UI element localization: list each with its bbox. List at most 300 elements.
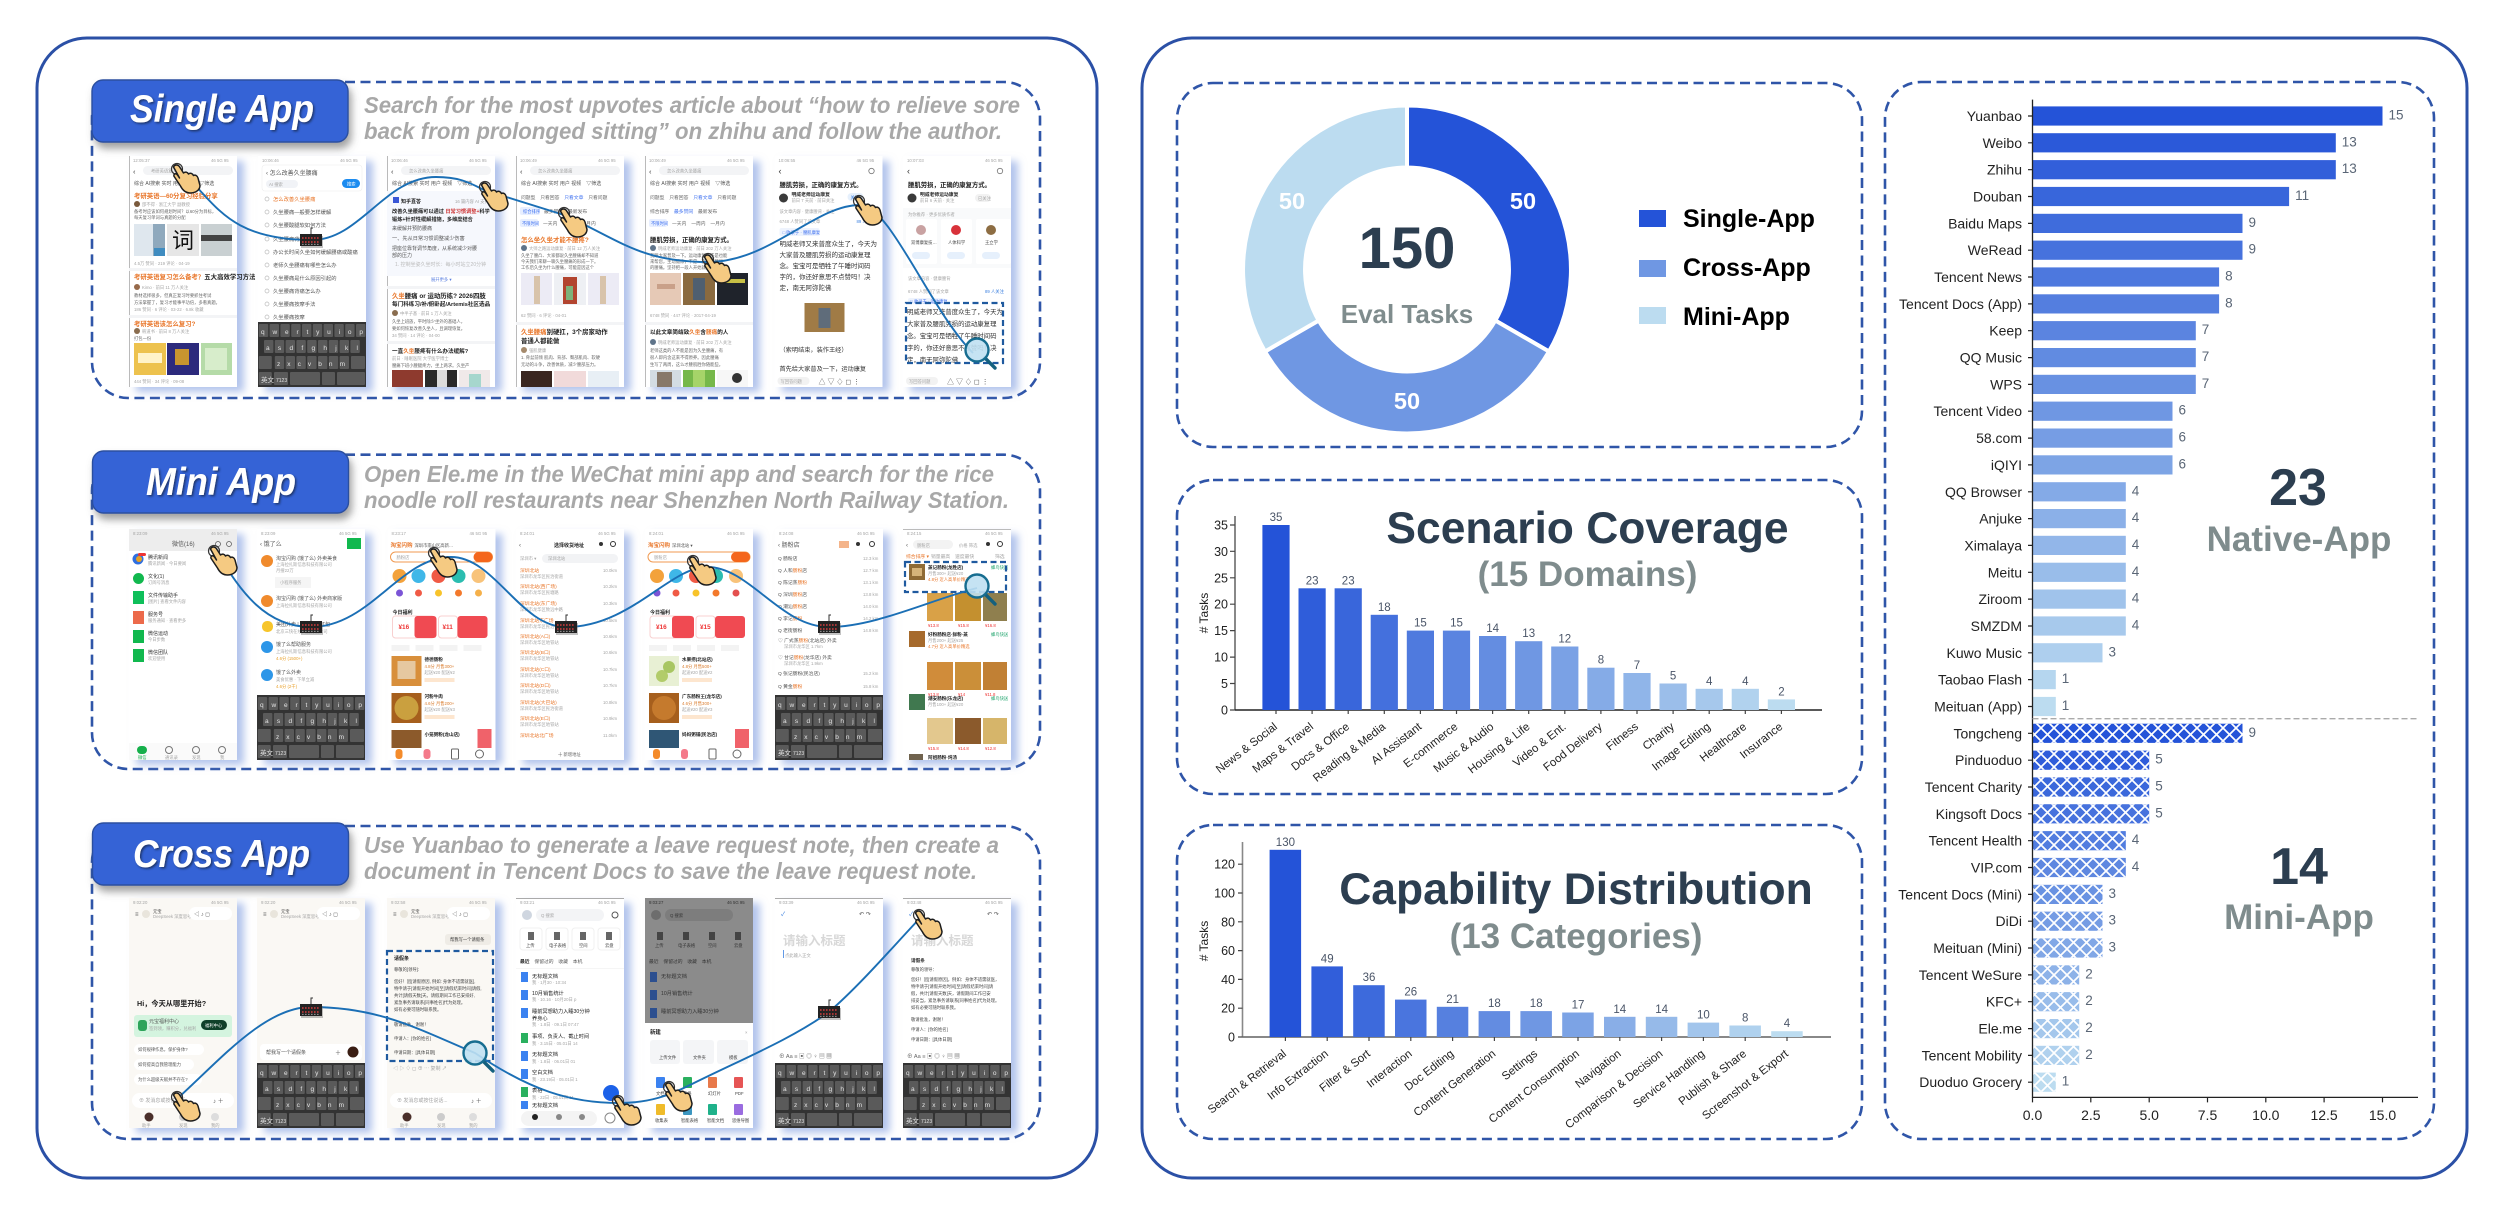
phone: new document sheet: 文档 [656, 1090, 665, 1097]
phone: rice noodle restaurant results: 46 5G 95 [985, 531, 1003, 536]
badge: Single App: Single App [130, 88, 314, 131]
action icon: tap search box [688, 556, 716, 585]
app labels: DiDi [1996, 913, 2022, 929]
phone: filter panel results: 久坐了腰凸、大家都说久坐腰痛却不知道 [521, 252, 599, 259]
action icon: follow [854, 196, 882, 225]
phone: Tencent Docs home: 空白文档 [532, 1068, 553, 1076]
bar chart: scenario coverage: AI Assistant [1370, 720, 1425, 767]
bar values: 5 [2155, 805, 2163, 820]
bar values: 4 [2132, 510, 2140, 525]
bar values: 8 [2225, 268, 2233, 284]
bar chart: capability distribution: Service Handling [1631, 1048, 1707, 1111]
bar chart: scenario coverage: Video & Ent. [1511, 721, 1569, 770]
phone: zhihu search results: 邵不得 · 浙江大学 副教授 [142, 201, 191, 208]
phone: document with pasted note: 假，共计[请假天数]天，请假期间工作已安 [911, 990, 991, 997]
phone: Tencent Docs home: 无标题文档 [532, 972, 558, 980]
action icon: type query [818, 615, 841, 635]
phone: rice noodle restaurant results: ¥15.8 [928, 746, 939, 751]
phone: zhihu search results: 方法掌握了，复习才能事半功倍，多看真题。 [134, 299, 220, 306]
phone: AI answer results: 腰痛下班小腰腿疼力，坐上两求。久坐产 [392, 362, 469, 369]
phone: article with follow button: 89 人关注 [856, 218, 876, 225]
phone: filter panel results: 最多赞同 最新发布 [544, 208, 587, 215]
bar chart: capability distribution: 130 [1276, 837, 1295, 849]
phone: rice noodle restaurant results: 4.8分 近人高单价精选 [928, 576, 970, 583]
bar values: 6 [2178, 430, 2186, 445]
phone: WeChat search for Ele.me: 4.6分 (2千) [276, 683, 298, 690]
action icon: tap search [172, 164, 200, 193]
bar chart: scenario coverage: 30 [1214, 545, 1228, 559]
highlight box: mini app [905, 562, 1006, 592]
legend: Cross-App [1683, 254, 1811, 282]
phone: new document sheet: 文件夹 [693, 1054, 707, 1061]
bar chart: capability distribution: Publish & Share [1677, 1048, 1749, 1108]
phone: Ele.me rice noodle search: 淘宝闪购 [648, 541, 671, 549]
action icon: tap sort [558, 208, 587, 237]
phone: Ele.me search list: 深圳市龙华区地铁站 [520, 688, 559, 695]
phone: document with pasted note: z x c v b n m [922, 1102, 990, 1109]
app labels: Douban [1973, 188, 2022, 204]
app labels: 58.com [1976, 430, 2022, 446]
x axis labels: 10.0 [2252, 1107, 2280, 1123]
bar values: 5 [2155, 778, 2163, 794]
phone: AI answer results: 每门科练习/补/俯卧起/Artemis社区选品 [392, 300, 491, 308]
phone: blank document editor: ↶ ↷ [859, 911, 871, 918]
heading: capability distribution: (13 Categories) [1450, 917, 1702, 956]
phone: document with pasted note: a s d f g h j k l [911, 1086, 1004, 1093]
phone: filter panel results: 强肌健康 [529, 347, 547, 354]
bar chart: scenario coverage: 15 [1450, 618, 1463, 630]
phone: Ele.me search suggestions: 13.1 km [863, 580, 879, 585]
phone: Ele.me search list: 选择收货地址 [554, 542, 584, 549]
phone: document with pasted note: 申请日期：[具体日期] [911, 1036, 952, 1043]
callout: 23 native apps: Native-App [2207, 520, 2391, 559]
phone: article with follow button: 念。宝宝可是牺牲了午睡时间码 [780, 261, 871, 270]
phone: filter panel results: 怎么改善久坐腰痛 [538, 167, 573, 174]
bar chart: scenario coverage: 35 [1214, 518, 1228, 532]
phone: Ele.me search list: 深圳市龙华区民塘路 [520, 589, 559, 596]
bar chart: capability distribution: 80 [1221, 915, 1235, 929]
phone: rice noodle restaurant results: 阿姐肠粉·炖汤 [928, 754, 957, 761]
phone: Ele.me search suggestions [775, 529, 883, 760]
phone: new document sheet: 空间 [708, 942, 717, 949]
phone: Yuanbao generated note: 特申请于[请假开始时间]至[请假结束时间]请假, [394, 985, 482, 992]
bars: native apps [2032, 106, 2382, 716]
bar chart: scenario coverage: Housing & Life [1466, 721, 1533, 776]
phone: Ele.me rice noodle search [645, 529, 753, 760]
bar chart: scenario coverage: 4 [1706, 676, 1713, 688]
phone: rice noodle restaurant results: 4.7分 近人高单价精选 [928, 643, 970, 650]
phone: article with recommended authors: 定，南无阿弥陀佛 [907, 355, 959, 364]
phone: Ele.me search list: 深圳市龙华区民治街道 [520, 573, 564, 580]
phone: Ele.me search list: 深圳市龙华区致远中路 [520, 606, 564, 613]
action icon: tap input [172, 1092, 200, 1121]
phone: WeChat search for Ele.me: 美团外卖 | 美团外卖红包 [276, 621, 330, 628]
phone: filter panel results: 62 赞同 · 6 评论 · 04-01 [521, 312, 567, 319]
bar values: 4 [2132, 537, 2140, 552]
phone: WeChat search for Ele.me: 饿了么帮助服务 [276, 641, 311, 648]
phone: search suggestions with keyboard: 搜索 [347, 180, 356, 188]
phone: blank document editor: 46 5G 95 [857, 900, 875, 905]
app labels: Tencent Health [1929, 833, 2022, 849]
phone: document with pasted note: 申请人：[你的姓名] [911, 1026, 948, 1033]
bar chart: scenario coverage: 18 [1378, 602, 1391, 614]
phone: Ele.me rice noodle search: ¥15 [700, 624, 711, 631]
phone: rice noodle restaurant results: 蜂鸟快送 [991, 631, 1009, 638]
phone: article with follow button: ‹ [778, 166, 782, 176]
phone: Ele.me search suggestions: 15.8 km [863, 684, 879, 689]
phone: new document sheet: 思维导图 [732, 1117, 749, 1124]
phone: AI answer results: 46 5G 95 [469, 158, 487, 163]
phone: zhihu search results: 186 赞同 · 6 评论 · 03-22 · 6.8k 收藏 [134, 306, 204, 313]
phone: Tencent Docs home: 我 · 1月30 · 10:34 [532, 979, 567, 986]
app labels: Anjuke [1979, 511, 2022, 527]
phone: WeChat chat list: 腾讯新闻 [148, 554, 168, 561]
bar chart: capability distribution: 14 [1655, 1004, 1669, 1016]
phone: Ele.me search list: 深圳北站(大巴站) [520, 699, 557, 706]
bar chart: scenario coverage: 20 [1214, 598, 1228, 612]
bar chart: capability distribution: Interaction [1365, 1048, 1415, 1090]
bar chart: capability distribution: Content Generation [1412, 1048, 1498, 1119]
app labels: Ele.me [1978, 1021, 2022, 1037]
phone: Ele.me rice noodle search: 妈妈粥铺(民治店) [682, 731, 718, 738]
phone: Yuanbao generated note: 申请人：[你的姓名] [394, 1035, 431, 1042]
bar values: 3 [2108, 644, 2116, 659]
phone: Ele.me search suggestions: Q 潮汕肠粉店 [778, 603, 807, 610]
phone: document with pasted note: 9:03:48 [907, 900, 922, 905]
phone: blank document editor: 点此输入正文 [785, 952, 811, 959]
heading: scenario coverage: Scenario Coverage [1386, 504, 1789, 553]
phone: Yuanbao generated note [387, 898, 495, 1129]
phone: Ele.me mini app home: ¥11 [442, 624, 453, 631]
phone: AI answer results [387, 156, 495, 387]
action icon: type prompt [300, 998, 323, 1018]
phone: filter panel results: 怎么坐久坐才能不腰疼? [521, 235, 589, 244]
phone: search suggestions with keyboard [258, 156, 366, 387]
phone: Ele.me search list: 十 新增地址 [558, 751, 581, 758]
phone: sorted results: 10:06:49 [649, 158, 666, 163]
phone: Yuanbao typing prompt: ◁ ♪ ◻ [322, 911, 338, 918]
phone: new document sheet: 上传 [655, 942, 664, 949]
phone: Ele.me search list: 深圳市龙华区地铁站 [520, 672, 559, 679]
phone: AI answer results: 一、先从日常习惯调整减少伤害 [392, 234, 465, 242]
phone: article with follow button: 明威老师运动康复 [792, 191, 830, 198]
phone: Ele.me search suggestions: 14.2 km [863, 616, 879, 621]
app labels: Tongcheng [1953, 725, 2022, 741]
phone: Ele.me rice noodle search: 4.8分 月售500+ [682, 663, 712, 670]
phone: search suggestions with keyboard: 久坐腰痛—般要怎样缓解 [273, 208, 332, 216]
x axis labels: 2.5 [2081, 1107, 2101, 1123]
phone: Ele.me mini app home: 淘宝闪购 [390, 541, 413, 549]
phone: Yuanbao home: 元宝 [153, 908, 162, 915]
phone: Yuanbao generated note: 46 5G 95 [469, 900, 487, 905]
phone: zhihu search results: 考研英语复习怎么备考？五大高效学习方法 [134, 272, 256, 281]
phone: WeChat search for Ele.me: 7123 [275, 751, 286, 757]
phone: Yuanbao typing prompt: q w e r t y u i o p [260, 1070, 362, 1077]
phone: article with follow button: （索明结束，装作王经） [780, 346, 848, 354]
bar values: 4 [2132, 591, 2140, 606]
phone: WeChat search for Ele.me: z x c v b n m [276, 734, 344, 741]
bar values: 15 [2388, 108, 2404, 122]
phone: search suggestions with keyboard: z x c v b n m [277, 361, 345, 368]
phone: sorted results: 明威老师运动康复 · 前日 202 万人关注 [658, 245, 732, 252]
phone: Ele.me search list: 10.3km [603, 601, 618, 606]
panel: single app example [92, 80, 1040, 398]
phone: search suggestions with keyboard: 久坐腰痛是什么原因引起的 [273, 274, 337, 282]
action icon: tap filter [480, 182, 508, 211]
phone: article with follow button: 首先给大家普及一下，运动康复 [780, 365, 866, 373]
phone: search suggestions with keyboard: 老师久坐腰痛有哪些怎么办 [273, 261, 337, 269]
phone: rice noodle restaurant results: 月售100+ 起送¥20 [928, 701, 964, 708]
phone: WeChat chat list: 微信 [138, 754, 147, 761]
phone: WeChat search for Ele.me: 北京三快在线科技有限公司 [276, 628, 328, 635]
phone: AI answer results: 怎么改善久坐腰痛 [409, 167, 444, 174]
bar values: 2 [2085, 966, 2093, 981]
phone: Ele.me search list: 深圳北站(B口) [520, 649, 551, 656]
bar chart: scenario coverage: 2 [1778, 686, 1785, 698]
trajectory: cross app [178, 917, 921, 1103]
phone: Yuanbao home: ⊕ 发消息或按住说话... [139, 1097, 190, 1104]
action icon: verify [966, 574, 995, 604]
phone: article with recommended authors: 前日 6 天前 · 关注 [920, 197, 955, 204]
phone: article with recommended authors: □ 收录于 · 运动康复 [910, 298, 948, 305]
phone: article with recommended authors: 大家普及腰肌劳损的运动康复理 [907, 319, 997, 328]
phone: filter panel results: 工作后久坐为什么腰痛，可能是因这个 [521, 264, 595, 271]
phone: AI answer results: 展开更多 ▾ [431, 276, 452, 283]
donut chart [1243, 106, 1571, 433]
bar chart: scenario coverage: Image Editing [1650, 721, 1713, 774]
phone: sorted results: 老师这类的人不能是因为久坐腰痛，有 [650, 347, 724, 354]
phone: Ele.me search list: 10.8km [603, 700, 618, 705]
phone: Yuanbao home: 元宝福利中心 [149, 1018, 179, 1025]
phone: filter panel results: 一天内 一周内 一月内 [543, 220, 596, 227]
highlight box: cross app [387, 951, 493, 1061]
phone: Yuanbao typing prompt: ＋ [335, 1050, 341, 1057]
phone: sorted results: 来帮您，主动锻炼，不是一直躺着腰痛 [650, 258, 724, 265]
phone: new document sheet: PDF [735, 1091, 744, 1096]
bar chart: capability distribution: 10 [1697, 1010, 1710, 1022]
phone: Yuanbao generated note: 尊敬的[领导]: [394, 966, 419, 973]
phone: zhihu search results: 4.5万 赞同 · 219 评论 · 04-19 [134, 260, 190, 267]
phone: Ele.me mini app home: 46 5G 95 [470, 531, 488, 536]
phone: Ele.me rice noodle search: 肠粉店 [654, 554, 668, 561]
phone: rice noodle restaurant results: 8:24:15 [907, 531, 922, 536]
phone: document with pasted note: 46 5G 95 [985, 900, 1003, 905]
phone: Tencent Docs home: 云盘 [605, 942, 614, 949]
app labels: Taobao Flash [1938, 672, 2022, 688]
phone: Ele.me search suggestions: 13.8 km [863, 592, 879, 597]
bar chart: scenario coverage: E-commerce [1402, 721, 1460, 770]
bar chart: scenario coverage: 23 [1342, 575, 1355, 587]
phone: rice noodle restaurant results: 肠粉店 [917, 542, 931, 549]
phone: WeChat search for Ele.me: 上海拉扎斯信息科技有限公司 [276, 648, 332, 655]
phone: Ele.me search list: 10.6km [603, 650, 618, 655]
phone: Ele.me search list: 深圳市龙华区地铁站 [520, 639, 559, 646]
phone: Ele.me mini app home: 4.6分 月售200+ [424, 700, 455, 707]
phone: rice noodle restaurant results: 筛选 [995, 553, 1005, 560]
phone: Ele.me search list: 深圳北站东广场 [520, 617, 554, 624]
phone: WeChat chat list: 服务通知 · 查看更多 [148, 617, 187, 624]
donut center text: 150 [1359, 216, 1455, 281]
phone: document with pasted note: 您好！因[请假原因]，例如：身体不适需就医， [911, 976, 999, 983]
heading: capability distribution: Capability Distribution [1339, 865, 1813, 914]
phone: Ele.me search list: 深圳北站(西广场) [520, 583, 557, 590]
phone: Ele.me search list: 10.7km [603, 667, 618, 672]
phone: blank document editor: q w e r t y u i o p [778, 1070, 880, 1077]
app labels: iQIYI [1991, 457, 2022, 473]
bar chart: capability distribution: 20 [1221, 1002, 1235, 1016]
phone: Tencent Docs home: 电子表格 [549, 942, 567, 949]
phone: document with pasted note: 敬请批准，谢谢！ [911, 1016, 945, 1023]
panel: task examples (left) [37, 38, 1097, 1178]
phone: zhihu search results: 46 5G 95 [211, 158, 229, 163]
phone: AI answer results: 一直久坐腰疼有什么办法缓解? [392, 347, 469, 355]
x axis labels: 0.0 [2023, 1107, 2042, 1123]
phone: Ele.me search suggestions: Q 肠粉店 [778, 555, 798, 562]
phone: WeChat chat list: 欢迎使用 [148, 655, 165, 662]
bar chart: capability distribution: 120 [1214, 858, 1235, 872]
bar chart: scenario coverage: Music & Audio [1432, 721, 1496, 775]
app labels: Meituan (App) [1934, 698, 2022, 714]
phone: search suggestions with keyboard: AI 搜索 [269, 181, 284, 188]
phone: AI answer results: 锻炼+针对性缓解措施，多维度结合 [392, 215, 474, 223]
phone: Yuanbao generated note: 紧急事务请联系[同事姓名]代为处理。 [394, 999, 465, 1006]
phone: Ele.me search suggestions: 14.8 km [863, 628, 879, 633]
bar values: 4 [2132, 564, 2140, 579]
task description: single app: Search for the most upvotes article about “how to relieve sore [364, 92, 1020, 118]
phone: article with recommended authors: 人体科学 [948, 239, 966, 246]
phone: new document sheet: 表格 [683, 1090, 692, 1097]
heading: scenario coverage [1386, 504, 1789, 594]
bar values: 4 [2132, 859, 2140, 874]
phone: zhihu search results: 韩道书 · 前日 8 万人关注 [142, 328, 190, 335]
phone: Yuanbao home: 签到领，赚积分，兑福利 [149, 1025, 196, 1032]
phone: Yuanbao home: 我的 [211, 1122, 220, 1129]
phone: rice noodle restaurant results: 好粉肠粉店·鲜粉·蒸 [928, 631, 968, 638]
bar chart: scenario coverage: 8 [1598, 655, 1604, 667]
phone: article with recommended authors: 腰肌劳损，正确的康复方式。 [908, 180, 991, 189]
phone: search suggestions with keyboard: 怎么改善久坐腰痛 [273, 195, 316, 203]
phone: article with follow button: 大家普及腰肌劳损的运动康复理 [780, 250, 871, 259]
legend [1639, 205, 1815, 331]
phone: search suggestions with keyboard: 英文 [261, 375, 274, 384]
action icon: open article [702, 254, 731, 283]
app labels: Kuwo Music [1947, 645, 2022, 661]
app labels: WeRead [1968, 242, 2022, 258]
phone: article with recommended authors: 10:07:03 [907, 158, 924, 163]
legend: Single-App [1683, 205, 1815, 233]
phone: article with follow button: 关注 [850, 194, 860, 201]
phone: zhihu search results: 考研英语复习 [151, 167, 177, 174]
phone: article with recommended authors: 46 5G 95 [985, 158, 1003, 163]
phone: rice noodle restaurant results: 蜂鸟快送 [991, 695, 1009, 702]
bar chart: capability distribution: Comparison & Decision [1563, 1048, 1665, 1131]
phone: search suggestions with keyboard: 久坐腰痛按摩手法 [273, 300, 315, 308]
bar chart: scenario coverage [1197, 512, 1822, 785]
phone: AI answer results: 知乎直答 [401, 198, 421, 205]
x axis labels: 5.0 [2139, 1107, 2159, 1123]
phone: zhihu search results: 444 赞同 · 34 评论 · 09-08 [134, 378, 185, 385]
x axis labels: 7.5 [2198, 1107, 2217, 1123]
phone: AI answer results: 要如何恢复改善久坐人，且调理恢复。 [392, 325, 465, 332]
bar values: 13 [2342, 134, 2357, 149]
donut labels: 50 [1510, 188, 1536, 214]
phone: Ele.me search suggestions: ♡ 甘记肠粉(龙华店) 外卖 [778, 654, 832, 661]
phone: article with recommended authors [903, 156, 1011, 387]
phone: WeChat search for Ele.me: 4.6分 (1500+) [276, 655, 303, 662]
bar chart: capability distribution: 100 [1214, 886, 1235, 900]
app labels: Tencent WeSure [1919, 967, 2022, 983]
app labels: Keep [1989, 323, 2022, 339]
phone: Ele.me search suggestions: Q 李记肠粉 [778, 615, 802, 622]
phone: new document sheet: 幻灯片 [708, 1090, 721, 1097]
bar values: 9 [2248, 242, 2256, 257]
phone: Ele.me mini app home: 肠粉店 [396, 554, 410, 561]
phone: Yuanbao home: 发现 [179, 1122, 188, 1129]
phone: filter panel results: 无动的斗争，改善体质，减少腰部压力。 [521, 361, 598, 368]
phone: WeChat search for Ele.me: a s d f g h j k l [265, 718, 358, 725]
bar chart: capability distribution: 26 [1404, 987, 1417, 999]
bar values: 13 [2342, 161, 2357, 176]
action icon: paste note [818, 1000, 841, 1020]
bar values: 2 [2085, 993, 2093, 1008]
phone: Tencent Docs home: 我 · 22日 · 05.01日 11 [532, 1094, 574, 1101]
phone: Tencent Docs home: 最近 保留过的 收藏 本机 [520, 958, 583, 965]
phone: WeChat chat list: 文化(1) [148, 573, 164, 580]
phone: new document sheet: 46 5G 95 [727, 900, 745, 905]
phone: document with pasted note: 特申请于[请假开始时间]至[请假结束时间]请 [911, 983, 994, 990]
phone: Yuanbao generated note: 如有必要可随时联系我。 [394, 1006, 441, 1013]
bar chart: capability distribution: 18 [1530, 998, 1543, 1010]
phone: Ele.me search list: 深圳市龙华区地铁站 [520, 655, 559, 662]
phone: Yuanbao generated note: ◁ ♪ ◻ [452, 911, 468, 918]
app labels: Baidu Maps [1948, 215, 2022, 231]
phone: sorted results [645, 156, 753, 387]
phone: blank document editor: 英文 [778, 1116, 792, 1125]
app labels: VIP.com [1971, 860, 2022, 876]
phone: rice noodle restaurant results: ¥16.8 [985, 623, 996, 628]
bar values: 3 [2108, 940, 2116, 954]
phone: AI answer results: 综合 AI搜索 实时 用户 视频 ▽筛选 [392, 180, 472, 187]
bar chart: scenario coverage: 7 [1634, 660, 1640, 672]
phone: rice noodle restaurant results: ¥15.8 [958, 623, 969, 628]
phone: Ele.me search suggestions: Q 人和肠粉店 [778, 567, 807, 574]
bar chart: scenario coverage: 5 [1221, 677, 1228, 691]
phone: AI answer results: 1. 控制坐姿久坐时长：每小时站立20分钟 [395, 261, 486, 268]
phone: WeChat search for Ele.me: 淘宝闪购 (饿了么) 外卖商家版 [276, 595, 342, 602]
phone: rice noodle restaurant results: 蒸记肠粉(龙胜店) [928, 564, 964, 571]
phone: new document sheet: × [745, 1030, 748, 1035]
phone: filter panel results: ‹ [520, 167, 523, 176]
panel: scenario coverage [1177, 480, 1862, 794]
phone: zhihu search results: 12:05:37 [133, 158, 150, 163]
phone: Tencent Docs home: 养身心 [532, 1014, 548, 1022]
bar chart: scenario coverage: 12 [1558, 634, 1571, 646]
phone: Ele.me rice noodle search: 水果捞(北站店) [682, 656, 713, 663]
bar values: 9 [2248, 725, 2256, 740]
phone: Tencent Docs home [516, 898, 624, 1128]
phone: article with follow button: 定，南无阿弥陀佛 [780, 283, 832, 292]
bar chart: scenario coverage: # Tasks [1197, 593, 1211, 633]
bar values: 3 [2108, 886, 2116, 901]
bar values: 7 [2202, 376, 2209, 391]
phone: article with recommended authors: 为你推荐 · 更多优质作者 [908, 211, 955, 218]
phone: rice noodle restaurant results: ¥14.8 [958, 746, 969, 751]
phone: AI answer results: 中半子基 · 前日 1 万人关注 [400, 310, 452, 317]
phone: Yuanbao generated note: 元宝 [411, 908, 420, 915]
bar chart: scenario coverage: 5 [1670, 670, 1676, 682]
phone: rice noodle restaurant results: ¥11.8 [985, 692, 996, 697]
phone: article with recommended authors: 明威老师又来普度众生了，今天为 [907, 307, 1003, 316]
